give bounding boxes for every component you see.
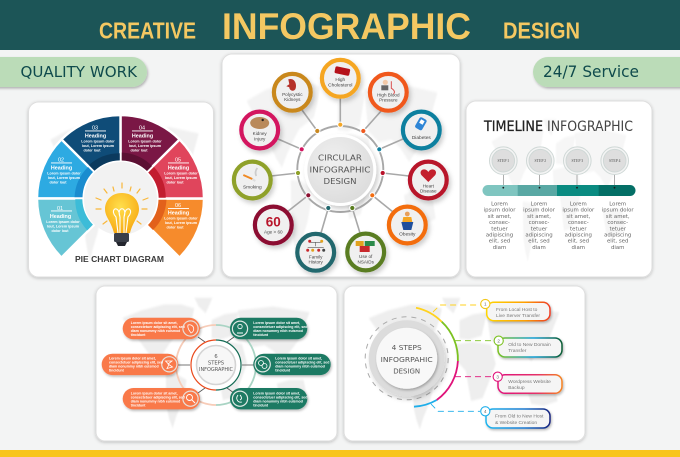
column 3: ipsum dolor [562, 208, 595, 214]
panel: pie chart diagram [20, 98, 221, 277]
segment 04 [120, 115, 180, 172]
label 02: lout, Lorem ipsum [48, 176, 81, 180]
timeline title: TIMELINE [483, 119, 543, 135]
node: use of nsaids: NSAIDs [358, 259, 375, 264]
callout 4: From Old to New Host [495, 414, 544, 420]
node: high cholesterol: Cholesterol [328, 82, 352, 88]
column 1: consec- [489, 220, 510, 226]
pill: green top [230, 318, 307, 339]
pill: orange middle: Lorem ipsum dolor sit amet, [109, 357, 156, 361]
callout 2 [494, 336, 562, 357]
column 2: adipiscing [525, 232, 553, 238]
label 06: dolor lout [166, 226, 184, 230]
callout 1: 1 [484, 302, 487, 307]
label 03: 03 [92, 126, 98, 132]
column 3: tetuer [570, 226, 587, 232]
step circles and stems: STEP 1 [498, 159, 509, 163]
title: design: DESIGN [503, 18, 580, 44]
node: heart disease: Heart [423, 184, 435, 188]
step circles and stems: STEP 2 [535, 159, 546, 163]
title: infographic: INFOGRAPHIC [222, 6, 471, 47]
label 03: lout, Lorem ipsum [82, 144, 115, 148]
column 1: adipiscing [486, 232, 513, 238]
pill: green middle: Lorem ipsum dolor sit amet, [275, 357, 322, 361]
callout 1 [481, 299, 550, 321]
node: obesity: Obesity [399, 232, 416, 238]
node: use of nsaids: Use of [359, 254, 373, 259]
caption: pie chart diagram: PIE CHART DIAGRAM [75, 255, 164, 264]
node: smoking [234, 162, 271, 198]
callout 4: 4 [484, 409, 487, 414]
column 4: sit amet, [606, 214, 630, 220]
column 1: Lorem [491, 202, 508, 208]
pill: green bottom: consectetuer adipiscing elit, sed [253, 396, 307, 400]
timeline title [483, 119, 633, 135]
label 06: lout, Lorem ipsum [165, 221, 198, 225]
hub label: STEPS [208, 360, 224, 366]
pill: orange bottom [123, 388, 200, 409]
pill: orange top: Lorem ipsum dolor sit amet, [131, 321, 178, 325]
column 2: Lorem [531, 202, 547, 208]
label 06 [164, 203, 198, 230]
center gear backdrop [84, 162, 157, 235]
hub: circular infographic design: DESIGN [324, 177, 357, 186]
callout 2: Old to New Domain [508, 342, 551, 348]
label 01 [46, 206, 80, 233]
node: family history: Family [309, 254, 323, 259]
column 4: tetuer [609, 226, 627, 232]
node: diabetes [403, 112, 440, 148]
hub: circular infographic design: INFOGRAPHIC [310, 166, 371, 174]
hub label: INFOGRAPHIC [199, 367, 233, 373]
segment 03 [61, 98, 143, 180]
pill: orange bottom: tincidunt [131, 404, 146, 408]
node: kidney injury: Injury [254, 136, 266, 141]
label 06: 06 [175, 203, 181, 209]
node: high blood pressure: Pressure [379, 98, 398, 103]
column 4: Lorem [609, 202, 626, 208]
badge: quality work: QUALITY WORK [20, 63, 138, 81]
header banner [0, 0, 680, 50]
pill: orange top: consectetuer adipiscing elit, sed [131, 325, 185, 329]
pie chart segments [20, 98, 221, 258]
pill: green top: tincidunt [253, 333, 269, 337]
icon: light bulb [96, 183, 148, 246]
callout 4: & Website Creation [495, 420, 537, 426]
node: polycystic kidneys [274, 74, 311, 111]
label 04: 04 [139, 126, 145, 132]
panel: 4 steps infographic [344, 286, 585, 441]
node: age over 60: 60 [266, 214, 281, 230]
label 05 [164, 158, 198, 184]
timeline bar [482, 185, 636, 196]
pill: green bottom: Lorem ipsum dolor sit amet, [253, 392, 300, 396]
pill: green top: consectetuer adipiscing elit, sed [253, 325, 307, 329]
node: high blood pressure: High Blood [377, 92, 400, 97]
label 02: Lorem ipsum dolor [47, 172, 81, 176]
node: family history [297, 234, 334, 271]
node: diabetes: Diabetes [412, 135, 431, 141]
hub label [199, 354, 233, 373]
pill: orange top: tincidunt [131, 333, 146, 337]
callout 2: 2 [497, 338, 500, 343]
callout 2: Transfer [508, 348, 527, 354]
label 05: lout, Lorem ipsum [165, 176, 198, 180]
pill: orange middle: tincidunt [109, 369, 125, 373]
node: heart disease: Disease [420, 188, 437, 194]
pill: green top: diam nonummy nibh euismod [253, 329, 303, 333]
node: smoking: Smoking [243, 184, 262, 190]
segment 05 [139, 139, 221, 221]
column 4: consec- [607, 220, 628, 226]
column 2: diam [532, 245, 546, 251]
callout 4 [481, 407, 550, 428]
badge: quality work [0, 57, 147, 87]
node: kidney injury: Kidney [253, 131, 267, 136]
column 4: elit, sed [607, 239, 628, 245]
node: age over 60: Age > 60 [264, 230, 283, 234]
pill: orange middle: diam nonummy nibh euismod [109, 365, 159, 369]
label 02 [47, 158, 81, 184]
node: heart disease [410, 162, 447, 198]
node: obesity [389, 207, 426, 243]
node: use of nsaids [347, 234, 384, 270]
label 01: Lorem ipsum dolor [46, 220, 80, 224]
step circles and stems: STEP 3 [572, 159, 583, 163]
callout 1: From Local Host to [496, 307, 538, 313]
callout 3: Backup [508, 385, 525, 391]
label 04: Heading [132, 134, 153, 140]
node: kidney injury [241, 112, 278, 148]
label 05: dolor lout [166, 180, 184, 184]
label 06: Heading [168, 210, 189, 216]
column 3: adipiscing [565, 232, 592, 238]
column 2: tetuer [531, 226, 548, 232]
hub rings and connectors [176, 325, 256, 405]
node: high cholesterol: High [335, 77, 346, 83]
hub: circular infographic design [297, 126, 383, 212]
ring dots [295, 122, 385, 211]
pill: green middle [253, 354, 331, 375]
column 1: diam [493, 245, 506, 251]
label 05: 05 [175, 158, 181, 164]
pill: orange middle: consectetuer adipiscing elit, sed [109, 361, 163, 365]
callout 3: 3 [496, 374, 499, 379]
pill: orange top: diam nonummy nibh euismod [131, 329, 180, 333]
pill: orange bottom: Lorem ipsum dolor sit amet, [131, 392, 178, 396]
pill: orange top [123, 318, 200, 339]
node: age over 60 [255, 207, 292, 243]
segment 06 [147, 198, 204, 258]
column 4: diam [611, 245, 624, 251]
column 2: consec- [529, 220, 549, 226]
panel: circular infographic design [222, 54, 460, 277]
label 04: dolor lout [130, 148, 148, 152]
hub: circular infographic design: CIRCULAR [318, 154, 363, 162]
node: family history: History [309, 260, 324, 265]
coloured arc [414, 308, 458, 407]
label 06: Lorem ipsum dolor [164, 216, 198, 220]
connector lines [271, 98, 409, 233]
title: creative: CREATIVE [99, 18, 196, 44]
label 04: lout, Lorem ipsum [129, 144, 162, 148]
segment 01 [20, 176, 102, 258]
label 04: Lorem ipsum dolor [128, 140, 162, 144]
label 01: 01 [57, 206, 63, 212]
pill: green middle: tincidunt [275, 369, 291, 373]
label 03: Lorem ipsum dolor [81, 140, 115, 144]
callout 3 [493, 372, 562, 393]
pill: green bottom: diam nonummy nibh euismod [253, 400, 303, 404]
hub: 4 steps infographic design: INFOGRPAHIC [381, 355, 433, 364]
column 1: elit, sed [489, 239, 510, 245]
panel: 6 steps infographic [96, 286, 337, 441]
label 02: dolor lout [50, 180, 67, 184]
column 2: sit amet, [527, 214, 551, 220]
panel: timeline infographic [466, 101, 652, 277]
node: high blood pressure [370, 74, 407, 111]
column 1: sit amet, [488, 214, 512, 220]
label 02: 02 [58, 158, 64, 164]
hub: 4 steps infographic design: DESIGN [393, 366, 420, 376]
pill: green bottom: tincidunt [253, 404, 269, 408]
segment 02 [37, 139, 94, 198]
dashed connectors [431, 305, 493, 411]
pill: green middle: diam nonummy nibh euismod [275, 365, 325, 369]
pill: green middle: consectetuer adipiscing elit, sed [275, 361, 329, 365]
label 04 [128, 126, 162, 152]
column 3: diam [572, 245, 585, 251]
step circles and stems [490, 147, 628, 187]
label 01: Heading [50, 214, 71, 220]
node: polycystic kidneys: Kidneys [284, 97, 301, 102]
column 2: elit, sed [528, 239, 550, 245]
step circles and stems: STEP 4 [609, 159, 621, 163]
pill: orange bottom: consectetuer adipiscing elit, sed [131, 396, 185, 400]
column 4: adipiscing [604, 232, 631, 238]
hub: 4 steps infographic design: 4 STEPS [392, 343, 422, 352]
node: polycystic kidneys: Polycystic [282, 92, 303, 97]
timeline text columns [484, 202, 634, 251]
callout 3: Wordpress Website [508, 379, 551, 385]
segment labels [46, 126, 198, 233]
column 1: tetuer [491, 226, 509, 232]
column 3: Lorem [570, 202, 587, 208]
label 03: dolor lout [84, 148, 101, 152]
column 3: consec- [568, 220, 589, 226]
pill: green bottom [230, 388, 307, 409]
label 05: Heading [168, 166, 189, 172]
column 4: ipsum dolor [602, 208, 634, 214]
pill: orange bottom: diam nonummy nibh euismod [131, 400, 180, 404]
timeline title: INFOGRAPHIC [547, 119, 633, 135]
hub: 4 steps infographic design [365, 317, 448, 400]
column 3: sit amet, [566, 214, 590, 220]
node: high cholesterol [322, 60, 359, 97]
label 05: Lorem ipsum dolor [164, 172, 198, 176]
label 02: Heading [51, 166, 72, 172]
column 2: ipsum dolor [523, 208, 556, 214]
hub label: 6 [214, 354, 218, 360]
column 3: elit, sed [568, 239, 589, 245]
callout 1: Live Server Transfer [496, 313, 540, 319]
label 03: Heading [85, 134, 106, 140]
column 1: ipsum dolor [484, 208, 516, 214]
badge: 24/7 service [533, 57, 680, 87]
badge: 24/7 service: 24/7 Service [543, 62, 639, 81]
pill: orange middle [102, 354, 178, 375]
footer bar [0, 450, 680, 457]
label 01: dolor lout [52, 229, 69, 233]
pill: green top: Lorem ipsum dolor sit amet, [253, 321, 300, 325]
label 01: lout, Lorem ipsum [47, 224, 80, 228]
label 03 [81, 126, 115, 152]
